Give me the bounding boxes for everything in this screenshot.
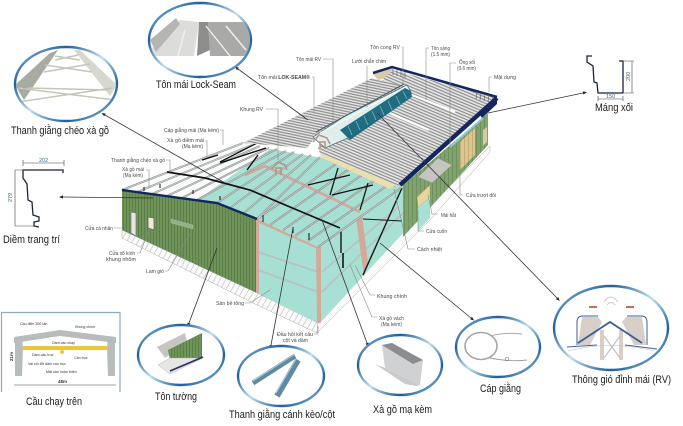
panel: overhead crane: 21m — [9, 352, 14, 361]
roof cyan part — [197, 149, 403, 247]
callout: ridge ventilator — [554, 286, 668, 370]
sliding door tan — [460, 128, 475, 170]
panel: overhead crane: Vai cột đỡ dầm cầu trục — [28, 362, 66, 366]
lock seam roof sheets right — [318, 70, 497, 188]
icon: gutter profile: 200 — [626, 72, 632, 81]
floor slab band left — [122, 230, 318, 333]
small labels: Cáp giằng mái (Mạ kèm) — [164, 127, 219, 134]
panel: overhead crane: 48m — [58, 379, 67, 384]
panel: overhead crane: Dầm cầu trục — [32, 353, 54, 357]
back parapet — [373, 67, 497, 97]
small labels: Lưới chắn chim — [352, 58, 386, 65]
callout: brace cable — [456, 317, 540, 377]
panel: overhead crane: Cần trục — [74, 356, 88, 360]
wall steel frame — [256, 215, 368, 323]
panel: overhead crane — [2, 312, 120, 392]
heading: decorative fascia: Diềm trang trí — [3, 234, 60, 246]
small labels: Cách nhiệt — [417, 247, 443, 253]
small labels: Cửa cuốn — [426, 228, 447, 235]
side cyan wall — [318, 183, 403, 323]
right wall green — [403, 113, 488, 237]
small labels: Khung RV — [240, 107, 264, 113]
panel: overhead crane: Cầu điện 300 tấn — [20, 322, 47, 326]
arrows — [63, 69, 583, 345]
window — [148, 217, 154, 230]
small labels: Mái hắt — [441, 212, 457, 219]
small labels: Đầu hồi kết cấu — [277, 332, 313, 338]
right eave — [400, 98, 497, 185]
skylights — [387, 95, 455, 130]
callout: purlin bracing — [15, 47, 117, 121]
far door — [483, 127, 487, 146]
panel: overhead crane: Khung chính — [75, 325, 95, 329]
floor slab band right — [317, 146, 490, 333]
small labels: Khung chính — [377, 294, 407, 300]
wall girts — [258, 207, 403, 292]
icon: decorative fascia profile — [8, 158, 64, 227]
roof braces — [144, 143, 373, 240]
right wall — [403, 113, 488, 237]
icon: decorative fascia profile: 202 — [39, 158, 48, 164]
small labels: (Mạ kèm) — [182, 144, 203, 150]
small labels: cột và dầm — [283, 338, 308, 344]
callout: wall sheet — [138, 325, 224, 385]
wall braces — [341, 188, 402, 275]
icon: decorative fascia profile: 279 — [8, 193, 14, 202]
crane portal frame — [14, 330, 116, 376]
rolling door tan — [417, 185, 430, 208]
small labels: Xà gồ vách — [379, 316, 404, 322]
RV frame front — [313, 135, 330, 149]
heading: rafter and column bracing: Thanh giằng cánh kèo/cột — [229, 408, 335, 421]
small labels: (Mạ kèm) — [381, 322, 402, 328]
callout: lock-seam sheet — [149, 3, 251, 77]
roof purlins — [122, 143, 401, 247]
left green wall — [122, 190, 257, 293]
ridge vent RV — [313, 84, 412, 149]
small labels: Cửa cá nhân — [85, 225, 113, 232]
building illustration — [122, 67, 497, 333]
canopy — [418, 158, 452, 183]
heading: galvanised purlin: Xà gồ mạ kèm — [373, 404, 432, 416]
rolling door cyan — [418, 197, 430, 231]
personnel door — [131, 212, 136, 236]
gutter — [450, 118, 483, 147]
panel: overhead crane: Dầm cầu chạy — [52, 341, 75, 345]
lock seam roof sheets left — [243, 78, 405, 148]
roof rafter — [245, 166, 360, 212]
callout: galvanised purlin — [358, 335, 442, 395]
panel: overhead crane: Mặt sàn hoàn thiện — [46, 370, 77, 374]
small labels — [85, 45, 516, 344]
back parapet studs — [393, 69, 493, 103]
heading: brace cable: Cáp giằng — [480, 382, 521, 395]
icon: gutter profile: 150 — [606, 94, 615, 100]
small labels: Ống xối — [459, 59, 475, 66]
purlin highlights — [122, 143, 401, 247]
small labels: Tôn mái RV — [296, 57, 322, 63]
small labels: Tôn cong RV — [370, 45, 401, 51]
small labels: Cửa sổ kính — [109, 250, 135, 257]
small labels: khung nhôm — [106, 257, 136, 263]
small labels: Cửa trượt đôi — [466, 192, 496, 199]
small labels: (Mạ kèm) — [123, 173, 143, 179]
small labels: Xà gồ diềm mái — [167, 138, 204, 144]
small labels: (1.5 mm) — [431, 52, 450, 58]
icon: gutter profile — [587, 56, 634, 101]
small labels: Lam gió — [146, 269, 164, 275]
heading: overhead crane: Cầu chạy trên — [26, 396, 82, 408]
louver — [171, 219, 193, 229]
small labels: (0.6 mm) — [457, 66, 476, 72]
heading: wall sheet: Tôn tường — [155, 391, 197, 403]
small labels: Mặt dựng — [494, 75, 516, 81]
small labels: Xà gồ mái — [122, 167, 144, 173]
leader lines — [114, 47, 492, 334]
heading: gutter: Máng xối — [595, 102, 633, 114]
left eave — [122, 190, 257, 219]
RV frame middle — [272, 162, 287, 175]
back parapet wall — [373, 68, 396, 80]
crane beam — [23, 346, 108, 350]
roof white left part — [122, 143, 270, 201]
yellow insulation strip — [320, 154, 396, 189]
heading: purlin bracing: Thanh giằng chéo xà gồ — [11, 124, 109, 137]
eave return — [480, 98, 497, 118]
front cyan gable wall — [257, 219, 318, 323]
small labels: Tôn sáng — [431, 46, 450, 52]
heading: lock-seam sheet: Tôn mái Lock-Seam — [156, 79, 236, 91]
callout: rafter and column bracing — [238, 346, 324, 406]
small labels: Sàn bê tông — [216, 301, 244, 307]
small labels: Tôn mái LOK-SEAM® — [258, 74, 310, 81]
small labels: Thanh giằng chéo xà gồ — [111, 157, 165, 164]
